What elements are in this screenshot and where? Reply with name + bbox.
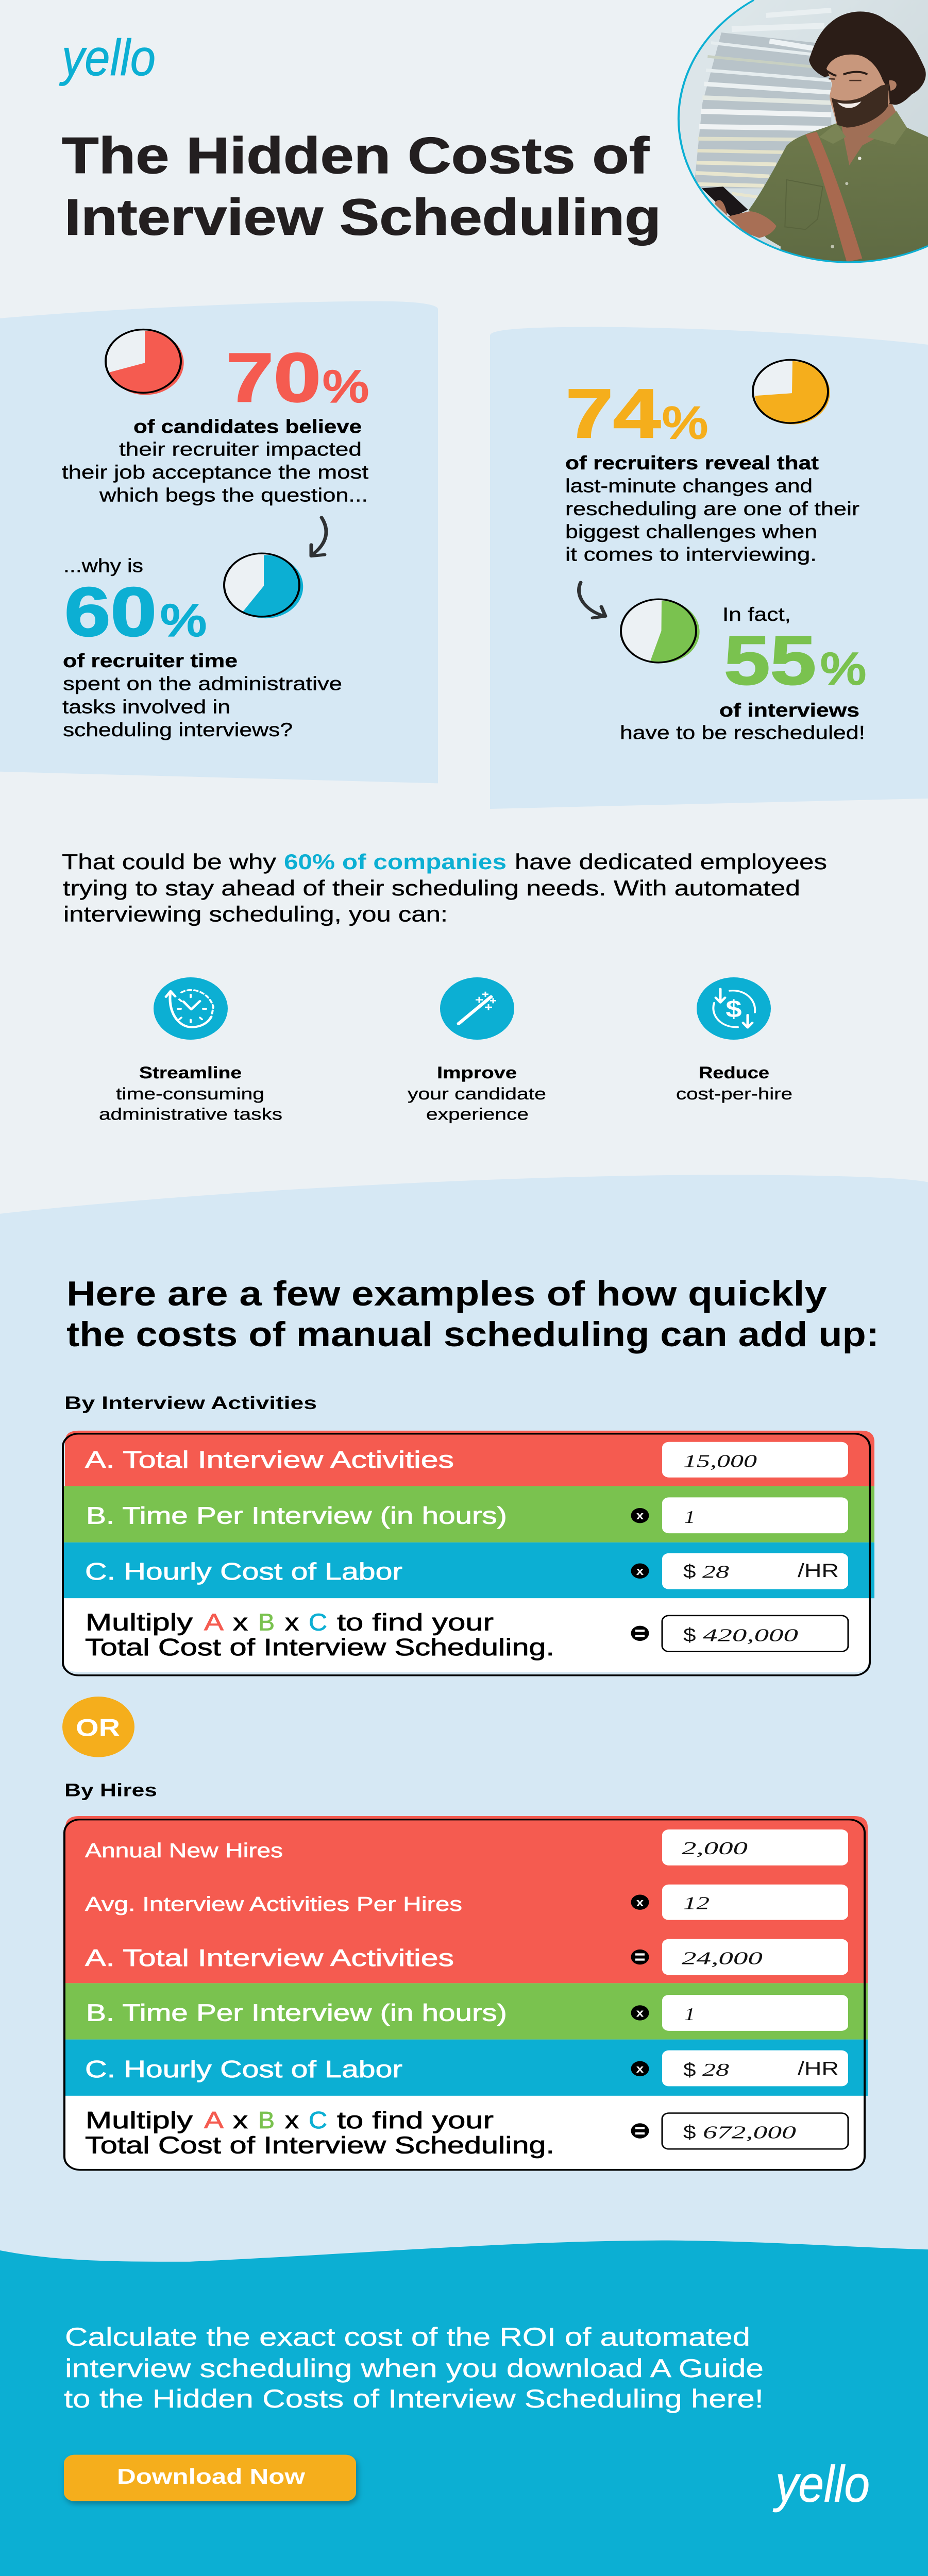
row total [85,1609,848,1660]
call to action text: Calculate the exact cost of the ROI of automated [65,2322,750,2351]
benefit: improve [408,977,546,1124]
row C: x [636,2063,644,2075]
row total: x [233,1609,248,1635]
benefit: reduce [676,977,792,1103]
pie chart: 55 percent [621,599,700,663]
row C [85,2050,848,2086]
stat: 55%: % [820,644,866,694]
badge: OR: OR [76,1714,120,1741]
section heading: Here are a few examples of how quickly [66,1274,827,1313]
logo: yello footer: yello [772,2455,870,2513]
row total: A [204,1609,224,1635]
subheading: by hires: By Hires [64,1780,157,1800]
text: recruiters reveal: of recruiters reveal that [565,452,819,473]
row total: to find your [337,2107,494,2133]
panel: left stats [0,301,438,783]
row C: C. Hourly Cost of Labor [85,2056,402,2082]
row total: B [258,1609,275,1635]
row avg interview activities: 12 [683,1893,710,1913]
stat: 70%: 70 [226,339,321,416]
row B: x [636,1510,644,1522]
intro paragraph: That could be why [62,850,276,874]
text: recruiters reveal [565,452,859,565]
stat: 60% [64,573,207,651]
button: download now [64,2455,356,2501]
text: administrative tasks [99,1105,282,1124]
text: Streamline [139,1064,242,1082]
row total: $ [683,1624,696,1646]
row B: B. Time Per Interview (in hours) [86,1502,507,1529]
row C [85,1553,848,1589]
intro paragraph: 60% of companies [284,850,507,874]
text [99,1064,282,1124]
row total: Multiply [86,2107,193,2133]
row B [86,1995,848,2031]
row total: 420,000 [703,1625,798,1646]
row A: 15,000 [683,1451,757,1471]
row C: 28 [702,1562,729,1582]
text: recruiter time [62,650,342,740]
benefit: streamline [99,977,282,1124]
stat: 60%: % [160,596,207,646]
call to action text [64,2322,764,2413]
text: Improve [437,1064,517,1082]
pie chart: 60 percent [224,553,303,618]
row avg interview activities [85,1885,848,1920]
photo: man looking at phone [677,0,928,262]
row B: 1 [684,2004,695,2024]
text: recruiters reveal: rescheduling are one of their [565,498,859,519]
stat: 55%: 55 [724,622,816,699]
row total: to find your [337,1609,494,1635]
pie chart: 70 percent [106,330,184,395]
row total: Total Cost of Interview Scheduling. [85,1634,554,1660]
row C: 28 [702,2060,729,2080]
icon: clock [154,977,228,1040]
title [62,127,661,246]
text: why is: ...why is [63,555,143,576]
text: interviews rescheduled: have to be rescheduled! [620,722,865,743]
arrow: curved down-right [579,582,605,618]
text: candidates believe: their job acceptance the most [62,461,368,483]
row total: x [285,1609,299,1635]
row total: B [258,2107,275,2133]
icon: dollar with arrows [697,977,771,1040]
row B [86,1497,848,1533]
icon: dollar with arrows: $ [725,995,742,1022]
text: candidates believe: their recruiter impacted [119,438,362,460]
row avg interview activities: x [636,1896,644,1909]
row avg interview activities: Avg. Interview Activities Per Hires [85,1893,462,1916]
text: experience [426,1105,529,1124]
intro paragraph: trying to stay ahead of their scheduling needs. With automated [63,876,800,900]
row total: Total Cost of Interview Scheduling. [85,2132,554,2159]
row total: C [309,2107,327,2133]
row total: x [233,2107,248,2133]
row A: A. Total Interview Activities [85,1446,454,1473]
text: candidates believe: which begs the question... [99,484,368,505]
row A: A. Total Interview Activities [85,1944,454,1971]
icon: magic wand [440,977,514,1040]
row total: Multiply [86,1609,193,1635]
text: in fact: In fact, [722,604,791,625]
text: your candidate [408,1085,546,1103]
stat: 70% [226,339,369,416]
section background: examples [0,1175,928,2295]
panel: right stats [490,327,928,809]
row total: C [309,1609,327,1635]
text: interviews rescheduled [620,699,865,743]
row total: $ [683,2121,696,2143]
text: recruiter time: scheduling interviews? [63,719,293,740]
row B: x [636,2007,644,2020]
row annual new hires [85,1829,848,1866]
intro paragraph: have dedicated employees [515,850,827,874]
calculator table: by interview activities [63,1431,874,1675]
intro paragraph: interviewing scheduling, you can: [63,902,448,926]
stat: 70%: % [323,362,369,412]
text: Reduce [699,1064,769,1082]
badge: OR [62,1697,134,1757]
text: time-consuming [116,1085,264,1103]
arrow: curved down-left [311,517,326,556]
button: download now: Download Now [117,2464,305,2488]
row C: /HR [798,1560,839,1581]
row C: C. Hourly Cost of Labor [85,1558,402,1585]
text: candidates believe: of candidates believe [133,416,362,437]
calculator table: by hires [64,1816,868,2170]
text: candidates believe [62,416,368,505]
stat: 74% [566,375,708,452]
row C: $ [683,1561,696,1582]
row A [85,1442,848,1478]
title: The Hidden Costs of [62,127,650,184]
stat: 74%: % [662,398,708,448]
section heading [66,1274,879,1354]
row total [85,2107,848,2159]
title: Interview Scheduling [64,189,661,246]
footer panel [0,2241,928,2576]
stat: 55% [724,622,866,699]
row C: $ [683,2059,696,2080]
row total: x [285,2107,299,2133]
text: recruiter time: spent on the administrative [63,673,342,694]
text: cost-per-hire [676,1085,792,1103]
row annual new hires: Annual New Hires [85,1840,283,1862]
text: recruiters reveal: it comes to interviewing. [565,544,817,565]
row A: 24,000 [682,1948,763,1969]
text: recruiters reveal: biggest challenges when [565,521,817,543]
subheading: by interview activities: By Interview Activities [64,1393,317,1413]
text: interviews rescheduled: of interviews [719,699,859,721]
intro paragraph [62,850,827,926]
row annual new hires: 2,000 [682,1838,748,1858]
text [676,1064,792,1103]
row C: /HR [798,2058,839,2079]
stat: 74%: 74 [566,375,661,452]
text [408,1064,546,1124]
call to action text: interview scheduling when you download A Guide [65,2354,764,2383]
row C: x [636,1565,644,1578]
row B: B. Time Per Interview (in hours) [86,1999,507,2026]
logo: yello top: yello [59,29,156,87]
call to action text: to the Hidden Costs of Interview Scheduling here! [64,2384,764,2413]
text: recruiter time: tasks involved in [62,696,230,717]
row total: A [204,2107,224,2133]
row total: 672,000 [703,2122,796,2142]
stat: 60%: 60 [64,573,157,651]
row A [85,1939,848,1975]
text: recruiters reveal: last-minute changes and [565,475,813,497]
pie chart: 74 percent [753,360,830,425]
text: recruiter time: of recruiter time [63,650,238,671]
row B: 1 [684,1507,695,1527]
section heading: the costs of manual scheduling can add up: [66,1315,879,1354]
